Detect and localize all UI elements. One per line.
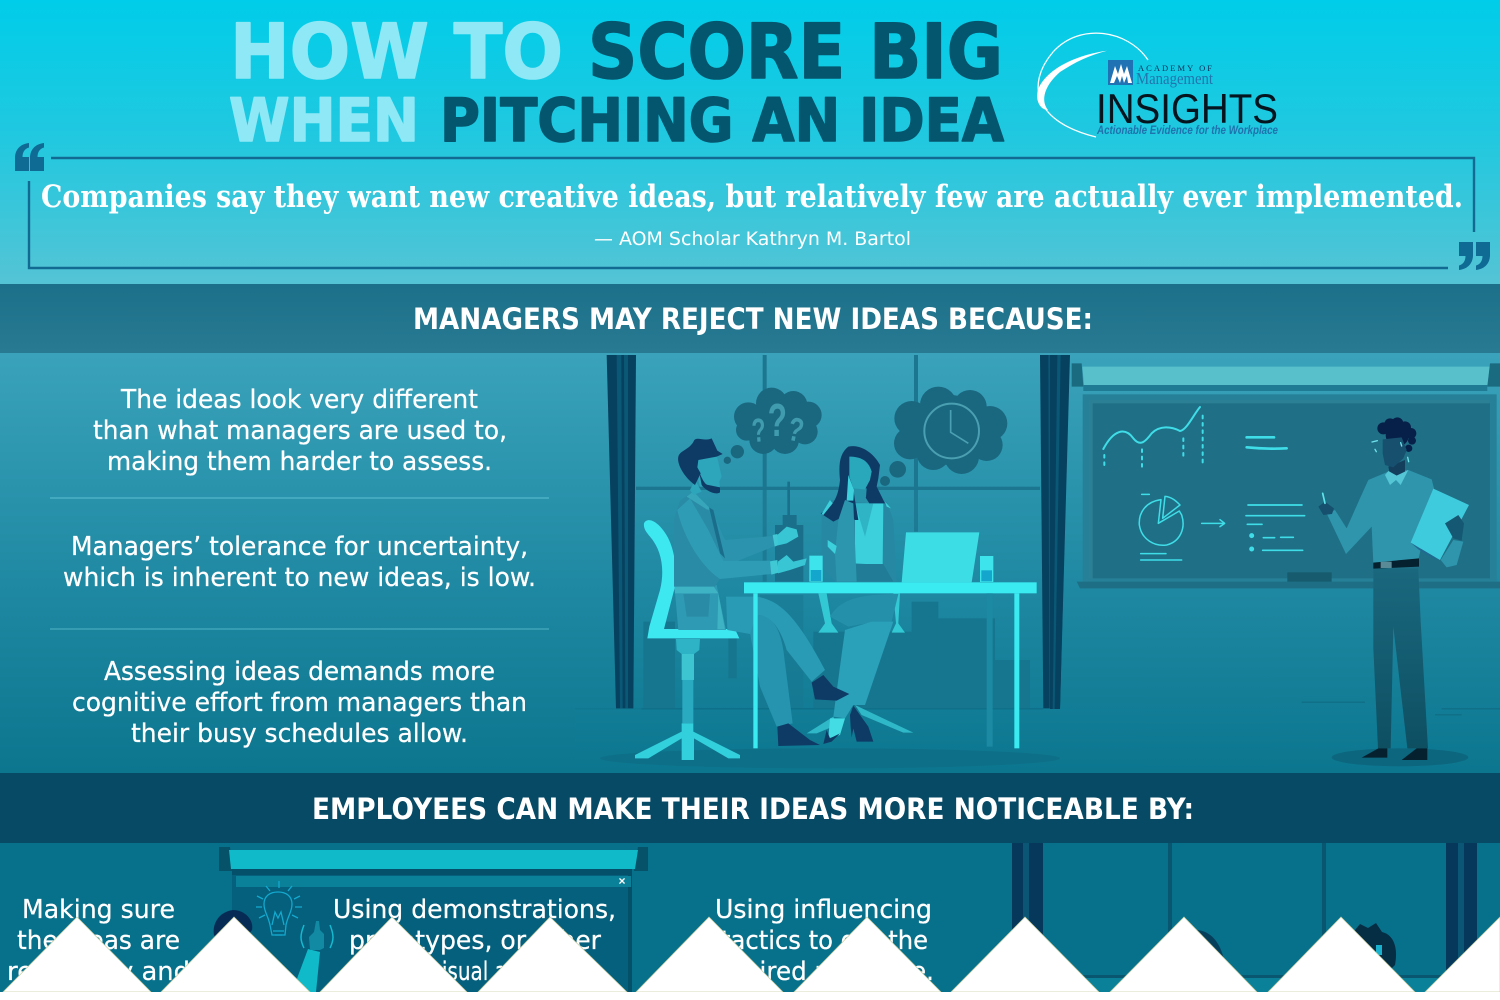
hip and pocket	[674, 585, 726, 630]
employee tip 2: visual aids,	[430, 957, 542, 987]
chair base	[807, 705, 913, 733]
figure hair	[1355, 923, 1396, 975]
quote frame	[15, 143, 1474, 268]
floor marks	[1302, 702, 1500, 715]
icon: raised hand	[292, 921, 333, 992]
chalk pie chart	[1139, 494, 1183, 560]
panel: managers section background	[0, 353, 1500, 773]
reason 3: Assessing ideas demands more	[104, 657, 495, 687]
chalk line chart	[1103, 407, 1203, 467]
reason 1: The ideas look very different	[120, 385, 478, 415]
employee tip 3: desired response.	[716, 957, 934, 987]
front arm	[677, 498, 772, 579]
icon: opening quotation mark	[15, 143, 44, 171]
belt	[1373, 558, 1419, 569]
employee tip 2: prototypes, or other	[349, 926, 601, 956]
header background	[0, 0, 1500, 284]
section bar: employees	[0, 773, 1500, 843]
cuffs and hands	[770, 534, 779, 575]
employee tip 3	[715, 895, 934, 987]
employee tip 1: the ideas are	[17, 926, 180, 956]
city skyline	[643, 482, 1030, 708]
woman	[807, 446, 913, 744]
reason 3	[72, 657, 527, 749]
window mullions	[636, 355, 1040, 582]
thought cloud: question marks: ?	[750, 412, 767, 450]
hair	[678, 438, 723, 485]
illustration: meeting room	[575, 355, 1077, 772]
floor shadow	[600, 748, 1060, 768]
logo: Academy of Management Insights: Management	[1136, 69, 1213, 88]
forearm	[1441, 540, 1463, 567]
trousers	[1373, 568, 1428, 748]
shoes	[828, 718, 845, 738]
curtain right	[1040, 355, 1069, 708]
presenter	[1318, 417, 1469, 760]
beard	[699, 473, 720, 493]
table	[744, 582, 1037, 748]
illustration: bottom screen	[214, 847, 648, 992]
icon: close mark: ×	[618, 874, 626, 888]
thought cloud: clock	[880, 387, 1007, 486]
figure eye	[1376, 945, 1382, 955]
title	[229, 7, 1005, 156]
hair	[821, 446, 885, 522]
employee tip 1: re	[7, 957, 33, 987]
roller screen	[1072, 363, 1500, 391]
hands	[828, 475, 854, 554]
sweat drops	[1372, 441, 1409, 462]
quote attribution: — AOM Scholar Kathryn M. Bartol	[594, 228, 911, 250]
curtain	[1050, 355, 1070, 709]
laptop	[902, 532, 979, 582]
illustration: bottom right room	[1012, 843, 1477, 992]
man's crossed foot	[812, 675, 849, 701]
face	[1383, 437, 1407, 467]
title: WHEN	[229, 86, 419, 156]
thigh	[726, 597, 825, 682]
reason 1	[93, 385, 507, 477]
presenter hair	[214, 910, 252, 945]
title: HOW TO	[230, 7, 563, 96]
raised arm	[835, 500, 857, 582]
reason 1: making them harder to assess.	[107, 447, 492, 477]
logo: Academy of Management Insights: ACADEMY OF	[1138, 63, 1212, 73]
torn paper edge	[0, 917, 1500, 1000]
thought cloud: question marks: ?	[768, 394, 787, 446]
man	[674, 438, 825, 746]
employee tip 1: Making sure	[22, 895, 175, 925]
employee tip 3: tactics to get the	[721, 926, 928, 956]
chair	[635, 520, 740, 760]
chalk list	[1246, 505, 1305, 551]
blazer	[822, 500, 897, 583]
neck and face	[690, 455, 722, 495]
glasses of water	[809, 556, 993, 582]
neck	[1388, 460, 1405, 476]
employee tip 1: y and	[118, 957, 190, 987]
collar	[1385, 470, 1408, 485]
section bar: managers	[0, 284, 1500, 353]
chalkboard	[1077, 394, 1500, 588]
logo: Academy of Management Insights: INSIGHTS	[1096, 85, 1278, 132]
back arm	[712, 510, 775, 563]
thought cloud: question marks	[724, 388, 822, 464]
paper	[1411, 489, 1469, 560]
chair arms	[818, 593, 905, 633]
floor shadow	[1332, 748, 1468, 766]
logo: Academy of Management Insights	[1037, 33, 1278, 137]
shoes	[1362, 748, 1427, 760]
logo: Academy of Management Insights: Actionable Evidence for the Workplace	[1096, 123, 1278, 137]
reason 3: cognitive effort from managers than	[72, 688, 527, 718]
lapels	[822, 500, 891, 515]
heading: managers: MANAGERS MAY REJECT NEW IDEAS BECAUSE:	[413, 302, 1093, 336]
hair	[1377, 417, 1416, 452]
title: PITCHING AN IDEA	[440, 86, 1005, 156]
heading: employees: EMPLOYEES CAN MAKE THEIR IDEAS MORE NOTICEABLE BY:	[312, 792, 1194, 826]
reason 3: their busy schedules allow.	[131, 719, 468, 749]
shirt	[1327, 470, 1434, 563]
illustration: presenter at chalkboard	[1050, 355, 1500, 772]
neck and face	[853, 488, 867, 501]
chalk hand	[1318, 502, 1334, 515]
reason 2: Managers’ tolerance for uncertainty,	[71, 532, 528, 562]
chalk arrow	[1202, 520, 1225, 527]
employee tip 2: Using demonstrations,	[333, 895, 616, 925]
hand with paper	[1445, 515, 1464, 541]
chalk strokes	[1247, 437, 1287, 449]
employee tip 1	[7, 895, 190, 987]
employee tip 2	[333, 895, 616, 987]
icon: light bulb	[256, 881, 302, 935]
closing quotation mark	[1459, 242, 1490, 270]
legs	[830, 594, 898, 627]
lower leg	[750, 615, 793, 727]
reason list	[50, 385, 549, 749]
reason 1: than what managers are used to,	[93, 416, 507, 446]
reason 2: which is inherent to new ideas, is low.	[63, 563, 536, 593]
jacket	[674, 492, 727, 587]
tie	[709, 507, 725, 558]
figure head	[1195, 930, 1225, 965]
employee tip 3: Using influencing	[715, 895, 932, 925]
shoe	[777, 723, 820, 746]
thought cloud: question marks: ?	[784, 411, 807, 450]
curtain left	[607, 355, 636, 708]
title: SCORE BIG	[588, 7, 1003, 96]
panel: employees section background	[0, 843, 1500, 992]
reason 2	[63, 532, 536, 593]
